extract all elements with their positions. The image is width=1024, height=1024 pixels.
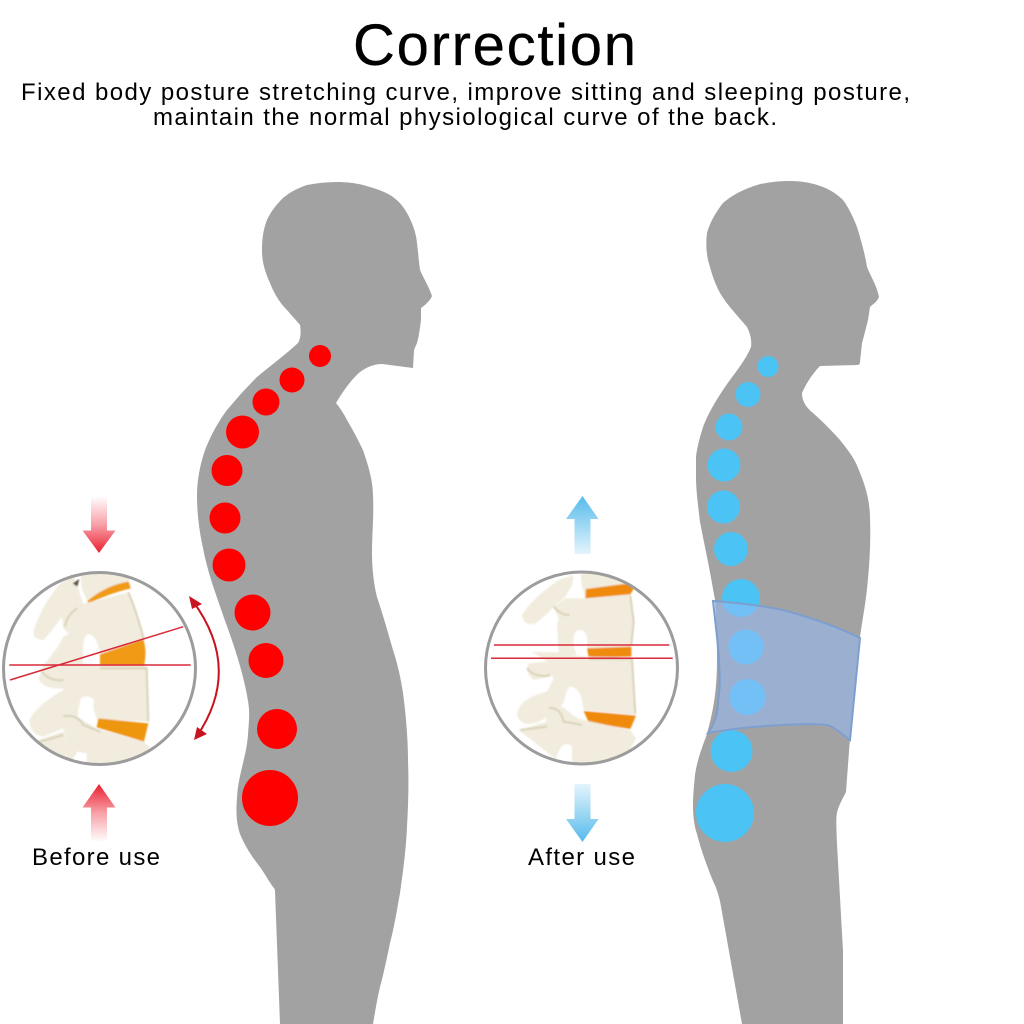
spine illustration: corrected disc: [486, 572, 678, 767]
red spine dots: [210, 345, 331, 826]
blue spine dots: [696, 356, 778, 842]
spine illustration: compressed disc: [4, 570, 196, 767]
subtitle text: Fixed body posture stretching curve, improve sitting and sleeping posture,: [21, 79, 910, 106]
arrow: blue up: [566, 496, 598, 554]
red alignment lines: parallel: [491, 645, 673, 658]
back brace belt: [708, 601, 860, 740]
arrow: blue down: [566, 784, 598, 842]
title: Correction: [353, 13, 636, 78]
label: after use: After use: [528, 844, 635, 871]
arrow: red down: [82, 496, 116, 553]
subtitle text: [21, 79, 910, 131]
label: before use: Before use: [32, 844, 160, 871]
red alignment lines: tilted: [9, 627, 191, 680]
subtitle text: maintain the normal physiological curve of the back.: [153, 104, 777, 131]
panel: body after use: [693, 181, 879, 1024]
silhouette: upright body: [693, 181, 879, 1024]
arrow: curved double red: [189, 596, 219, 740]
silhouette: hunched body: [197, 182, 432, 1024]
panel: body before use: [197, 182, 432, 1024]
arrow: red up: [82, 784, 116, 842]
